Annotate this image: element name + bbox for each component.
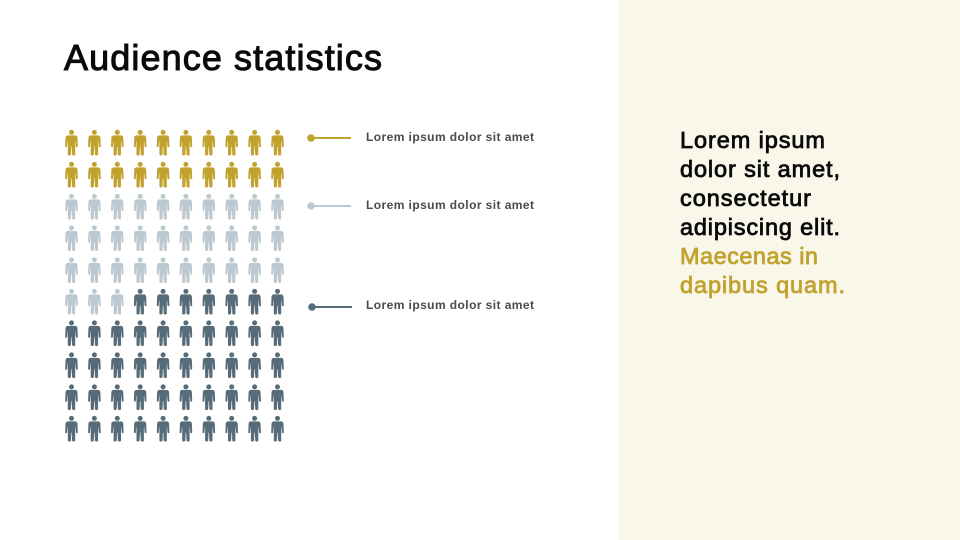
callout text: consectetur [680, 185, 811, 211]
gold label: Lorem ipsum dolor sit amet [366, 130, 534, 144]
gold people group [65, 130, 284, 188]
legend: light grey [307, 198, 534, 212]
gold marker [307, 134, 351, 142]
light grey people group [65, 194, 284, 314]
dark slate people group [65, 289, 284, 442]
light grey marker [307, 202, 351, 210]
dark slate marker [308, 303, 352, 311]
panel: right background [618, 0, 960, 540]
dark slate label: Lorem ipsum dolor sit amet [366, 298, 534, 312]
callout text [680, 127, 845, 298]
pictogram chart: 100 people [65, 130, 284, 442]
callout text: adipiscing elit. [680, 214, 840, 240]
title: Audience statistics [64, 37, 382, 78]
legend: dark slate [308, 298, 534, 312]
light grey label: Lorem ipsum dolor sit amet [366, 198, 534, 212]
callout text: dapibus quam. [680, 272, 845, 298]
legend: gold [307, 130, 534, 144]
callout text: Lorem ipsum [680, 127, 825, 153]
callout text: dolor sit amet, [680, 156, 840, 182]
callout text: Maecenas in [680, 243, 818, 269]
